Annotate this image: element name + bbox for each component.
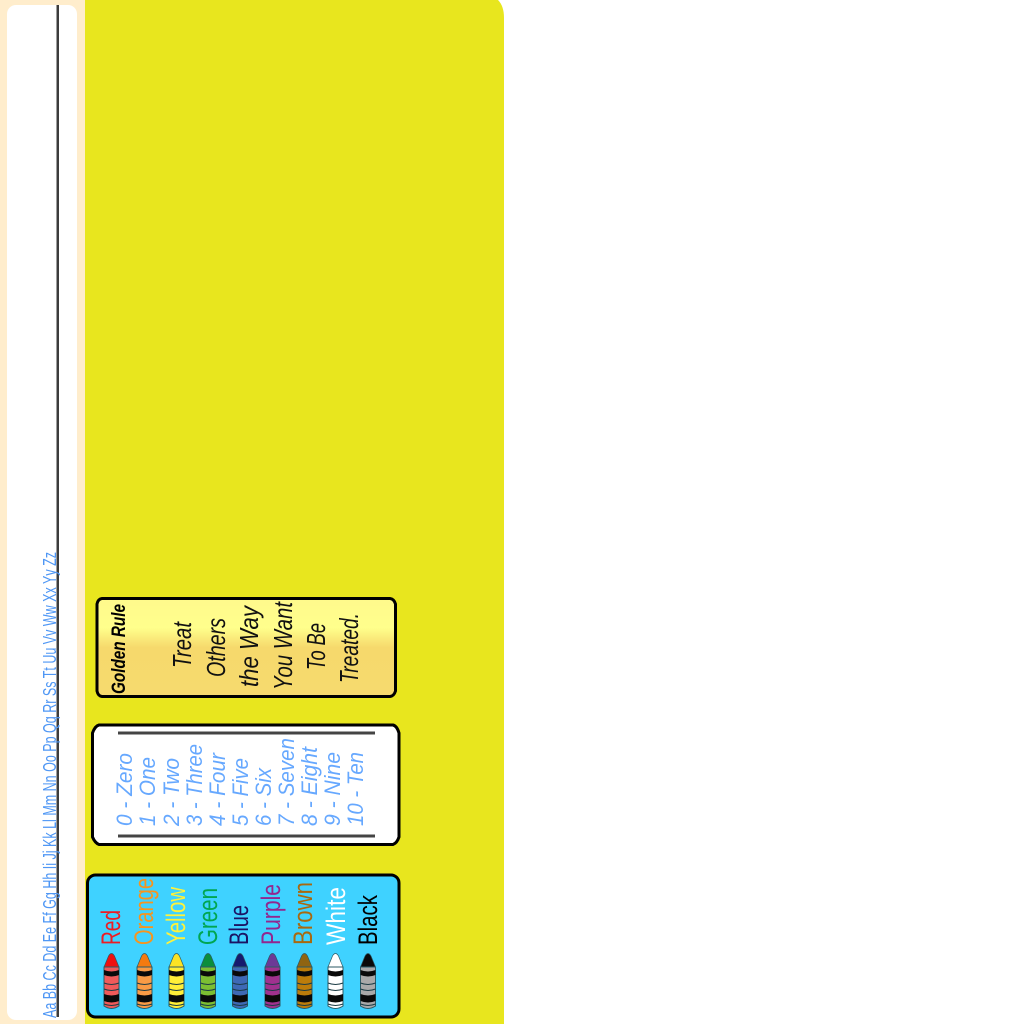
- golden rule text: To Be: [301, 623, 331, 670]
- icon: white crayon: [328, 954, 343, 1008]
- golden rule text: Treat: [167, 621, 197, 668]
- golden rule text: Others: [201, 618, 231, 677]
- icon: yellow crayon: [169, 954, 184, 1008]
- number words: 2 - Two: [159, 758, 184, 827]
- panel: numbers: [92, 725, 399, 844]
- number words: 5 - Five: [228, 758, 253, 826]
- yellow desk plate panel: [85, 0, 504, 1024]
- number words: 7 - Seven: [274, 738, 299, 826]
- left cream strip: [0, 0, 86, 1024]
- number words: 9 - Nine: [320, 752, 345, 826]
- colour words: Green: [193, 888, 223, 945]
- number words: [112, 738, 368, 827]
- colour words: Purple: [256, 884, 286, 945]
- number words: 8 - Eight: [297, 746, 322, 826]
- golden rule heading: Golden Rule: [109, 604, 130, 694]
- alphabet text: Aa Bb Cc Dd Ee Ff Gg Hh Ii Jj Kk Ll Mm Nn Oo Pp Qq Rr Ss Tt Uu Vv Ww Xx Yy Zz: [40, 552, 60, 1018]
- icon: blue crayon: [232, 954, 248, 1008]
- golden rule text: Treated.: [334, 613, 364, 683]
- number words: 3 - Three: [182, 744, 207, 826]
- icon: brown crayon: [297, 954, 312, 1008]
- golden rule text: [167, 601, 364, 690]
- colour words: [96, 878, 383, 945]
- icon: orange crayon: [137, 954, 152, 1008]
- number words: 4 - Four: [205, 751, 230, 826]
- colour words: Orange: [129, 878, 159, 945]
- golden rule text: You Want: [268, 601, 298, 690]
- number words: 10 - Ten: [343, 752, 368, 826]
- icon: red crayon: [104, 954, 119, 1008]
- panel: golden rule: [97, 598, 396, 696]
- panel: crayon colours: [88, 875, 399, 1017]
- colour words: Red: [96, 910, 126, 945]
- panel: alphabet strip: [7, 5, 77, 1020]
- number words: 0 - Zero: [112, 753, 137, 826]
- icon: green crayon: [200, 954, 216, 1008]
- icon: black crayon: [360, 954, 376, 1008]
- colour words: Brown: [288, 882, 318, 945]
- number words: 1 - One: [135, 757, 160, 826]
- colour words: White: [321, 887, 351, 945]
- colour words: Yellow: [161, 887, 191, 945]
- golden rule text: the Way: [234, 604, 264, 687]
- colour words: Black: [353, 895, 383, 945]
- number words: 6 - Six: [251, 767, 276, 826]
- colour words: Blue: [224, 905, 254, 945]
- icon: purple crayon: [265, 954, 280, 1008]
